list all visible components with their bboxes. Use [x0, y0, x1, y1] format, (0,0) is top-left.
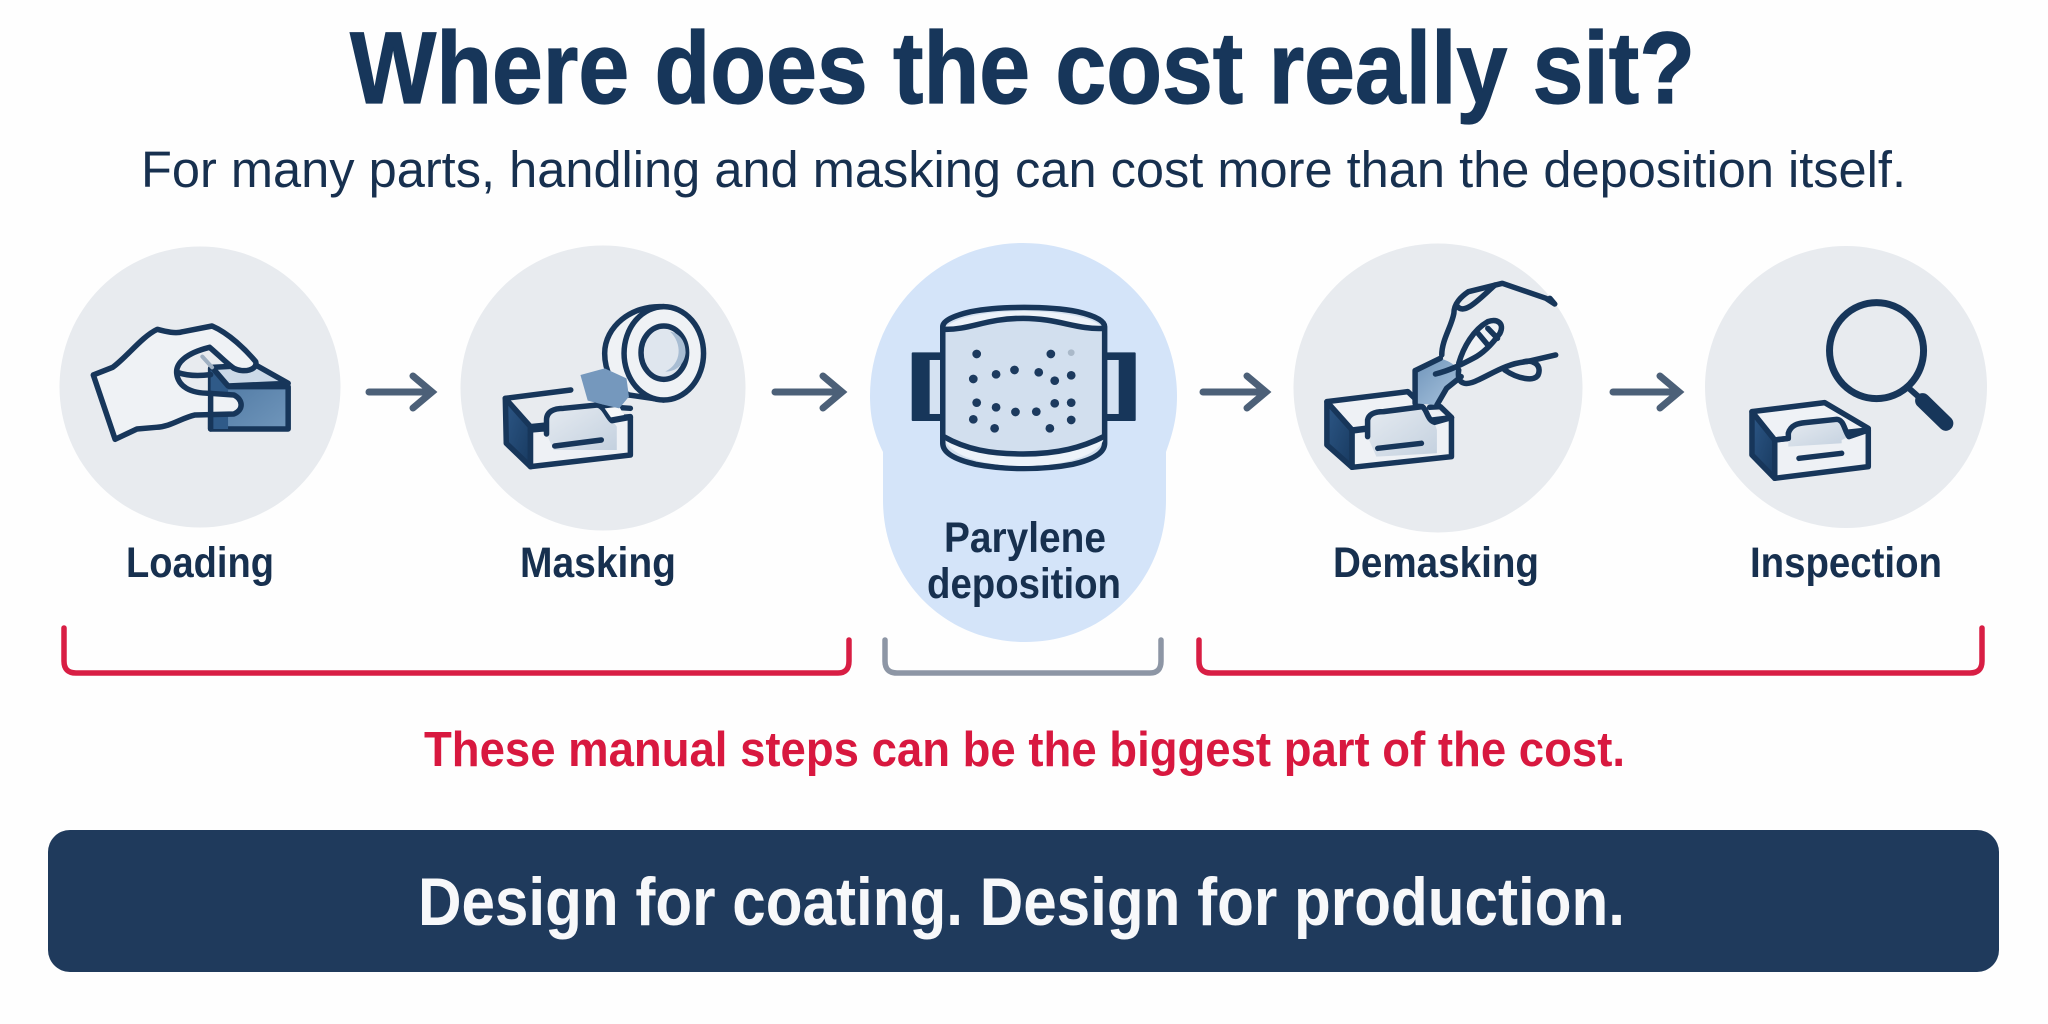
step: demasking	[1294, 244, 1582, 587]
arrow 3	[1203, 376, 1266, 408]
subtitle: For many parts, handling and masking can cost more than the deposition itself.	[141, 141, 1906, 198]
step: parylene deposition	[870, 243, 1177, 642]
bracket: right manual steps	[1199, 628, 1982, 673]
banner	[48, 830, 1999, 972]
icon: tape on tray	[505, 307, 704, 467]
step: loading	[60, 246, 340, 587]
label: masking: Masking	[520, 539, 676, 587]
loading circle	[60, 246, 340, 528]
arrow 1	[369, 376, 432, 408]
inspection circle	[1705, 246, 1987, 528]
demasking circle	[1294, 244, 1582, 532]
icon: hand holding block	[93, 326, 288, 439]
banner background	[48, 830, 1999, 972]
title: Where does the cost really sit?	[350, 11, 1695, 125]
bracket: deposition	[885, 640, 1161, 673]
icon: deposition chamber	[913, 307, 1135, 469]
label: demasking: Demasking	[1333, 539, 1539, 587]
label: loading: Loading	[126, 539, 274, 587]
callout text: These manual steps can be the biggest part of the cost.	[424, 723, 1625, 777]
icon: peeling mask from tray	[1327, 283, 1556, 467]
icon: magnifier and tray	[1752, 303, 1946, 478]
label: parylene deposition: deposition	[927, 560, 1121, 608]
highlight blob	[870, 243, 1177, 642]
label: parylene deposition: Parylene	[944, 514, 1106, 562]
bracket: left manual steps	[64, 628, 849, 673]
step: masking	[460, 246, 746, 587]
step: inspection	[1705, 246, 1987, 587]
arrow 4	[1613, 376, 1679, 408]
masking circle	[460, 246, 746, 530]
label: inspection: Inspection	[1750, 539, 1942, 587]
arrow 2	[775, 376, 842, 408]
banner text: Design for coating. Design for production.	[418, 864, 1625, 940]
